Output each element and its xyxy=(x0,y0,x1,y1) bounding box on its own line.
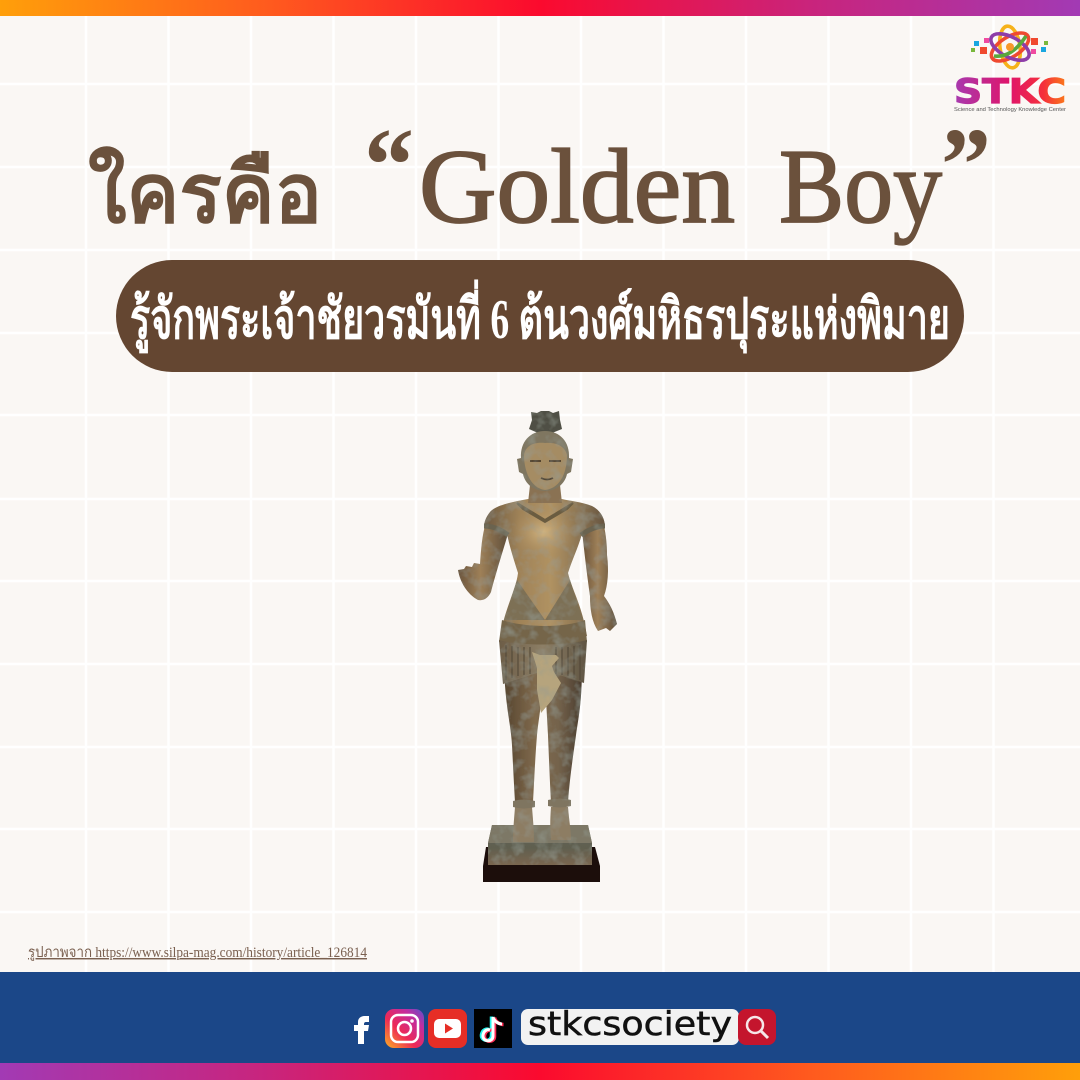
statue of Jayavarman VI xyxy=(458,411,617,882)
bottom gradient bar xyxy=(0,1063,1080,1080)
title Golden: Golden xyxy=(419,128,735,245)
neck xyxy=(528,485,562,503)
chest highlight xyxy=(509,506,577,558)
face xyxy=(524,443,567,490)
stone base xyxy=(488,825,592,865)
skirt pleats xyxy=(506,645,580,680)
crown xyxy=(529,411,562,433)
icon: facebook xyxy=(354,1016,369,1044)
anklets xyxy=(513,798,571,808)
subtitle pill xyxy=(116,260,964,372)
left arm and hand xyxy=(458,520,508,600)
icon: tiktok xyxy=(474,1009,512,1048)
pleated skirt xyxy=(499,640,587,684)
head xyxy=(517,431,573,491)
plinth xyxy=(483,847,600,882)
bronze figure xyxy=(458,411,617,865)
footer band xyxy=(0,972,1080,1063)
golden sash xyxy=(532,652,561,713)
icon: instagram xyxy=(385,1009,424,1048)
handle name: stkcsociety xyxy=(528,1004,732,1043)
icon: youtube xyxy=(428,1009,467,1048)
legs xyxy=(504,665,582,802)
armlets xyxy=(484,526,605,535)
opening quote: “ xyxy=(364,106,414,223)
logo wordmark: STKC xyxy=(954,72,1066,112)
title Thai word: ใครคือ xyxy=(88,146,322,240)
logo atom icon xyxy=(971,25,1048,69)
title Boy: Boy xyxy=(779,128,942,245)
pill background xyxy=(116,260,964,372)
right arm and hand xyxy=(582,526,617,631)
search field xyxy=(521,1009,739,1045)
closing quote: ” xyxy=(941,106,991,223)
STKC logo xyxy=(954,25,1066,113)
top gradient bar xyxy=(0,0,1080,16)
torso xyxy=(484,499,605,636)
base top face xyxy=(488,825,592,843)
necklace xyxy=(517,503,573,522)
icon: search button xyxy=(738,1009,776,1045)
image credit: รูปภาพจาก https://www.silpa-mag.com/history/article_126814 xyxy=(28,945,368,961)
feet xyxy=(513,807,571,842)
logo tagline: Science and Technology Knowledge Center xyxy=(954,107,1066,113)
belt xyxy=(499,620,587,646)
search box xyxy=(521,1004,739,1045)
hip pleat panels xyxy=(504,580,583,620)
facial features xyxy=(530,461,561,480)
title xyxy=(88,106,991,245)
